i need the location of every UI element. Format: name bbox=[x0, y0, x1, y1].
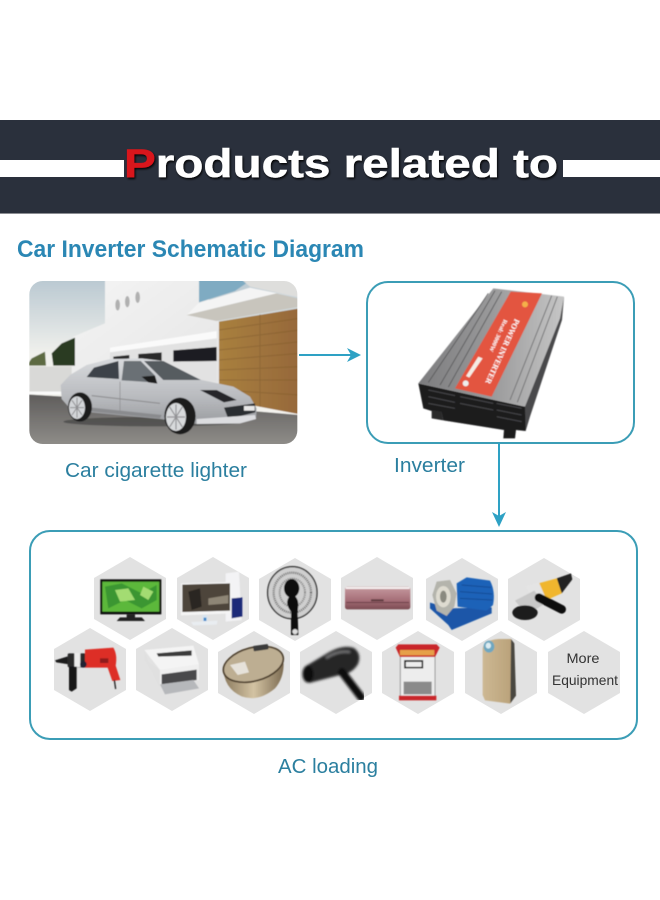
icon: air conditioner bbox=[341, 557, 413, 640]
arrow: inverter to AC loading bbox=[492, 443, 506, 527]
icon: hair dryer bbox=[300, 631, 372, 714]
banner title: Products related to bbox=[124, 142, 558, 186]
panel: AC loading equipment bbox=[30, 531, 637, 739]
photo: car in front of house bbox=[27, 278, 300, 445]
icon: television bbox=[94, 557, 166, 640]
label: car cigarette lighter: Car cigarette lighter bbox=[65, 459, 247, 482]
inverter label text: POWER INVERTER bbox=[483, 317, 521, 386]
icon: more equipment: Equipment bbox=[552, 672, 618, 688]
icon: desktop computer bbox=[177, 557, 249, 640]
icon: printer bbox=[136, 628, 208, 711]
icon: angle grinder bbox=[508, 558, 580, 641]
label: inverter: Inverter bbox=[394, 455, 465, 477]
icon: more equipment bbox=[548, 631, 620, 714]
icon: popcorn machine bbox=[382, 631, 454, 714]
icon: electric drill bbox=[54, 628, 126, 711]
icon: air purifier bbox=[465, 631, 537, 714]
icon: standing fan bbox=[259, 558, 331, 641]
section heading: Car Inverter Schematic Diagram bbox=[17, 236, 364, 263]
header banner bbox=[0, 120, 660, 214]
label: AC loading: AC loading bbox=[278, 755, 378, 778]
arrow: car to inverter bbox=[299, 348, 361, 362]
infographic canvas bbox=[0, 120, 660, 777]
icon: water pump bbox=[426, 558, 498, 641]
inverter label text: Real: 3000W bbox=[487, 318, 508, 352]
icon: power inverter bbox=[418, 288, 564, 438]
icon: rice cooker bbox=[218, 631, 290, 714]
panel: inverter bbox=[367, 282, 634, 443]
icon: more equipment: More bbox=[566, 650, 600, 666]
